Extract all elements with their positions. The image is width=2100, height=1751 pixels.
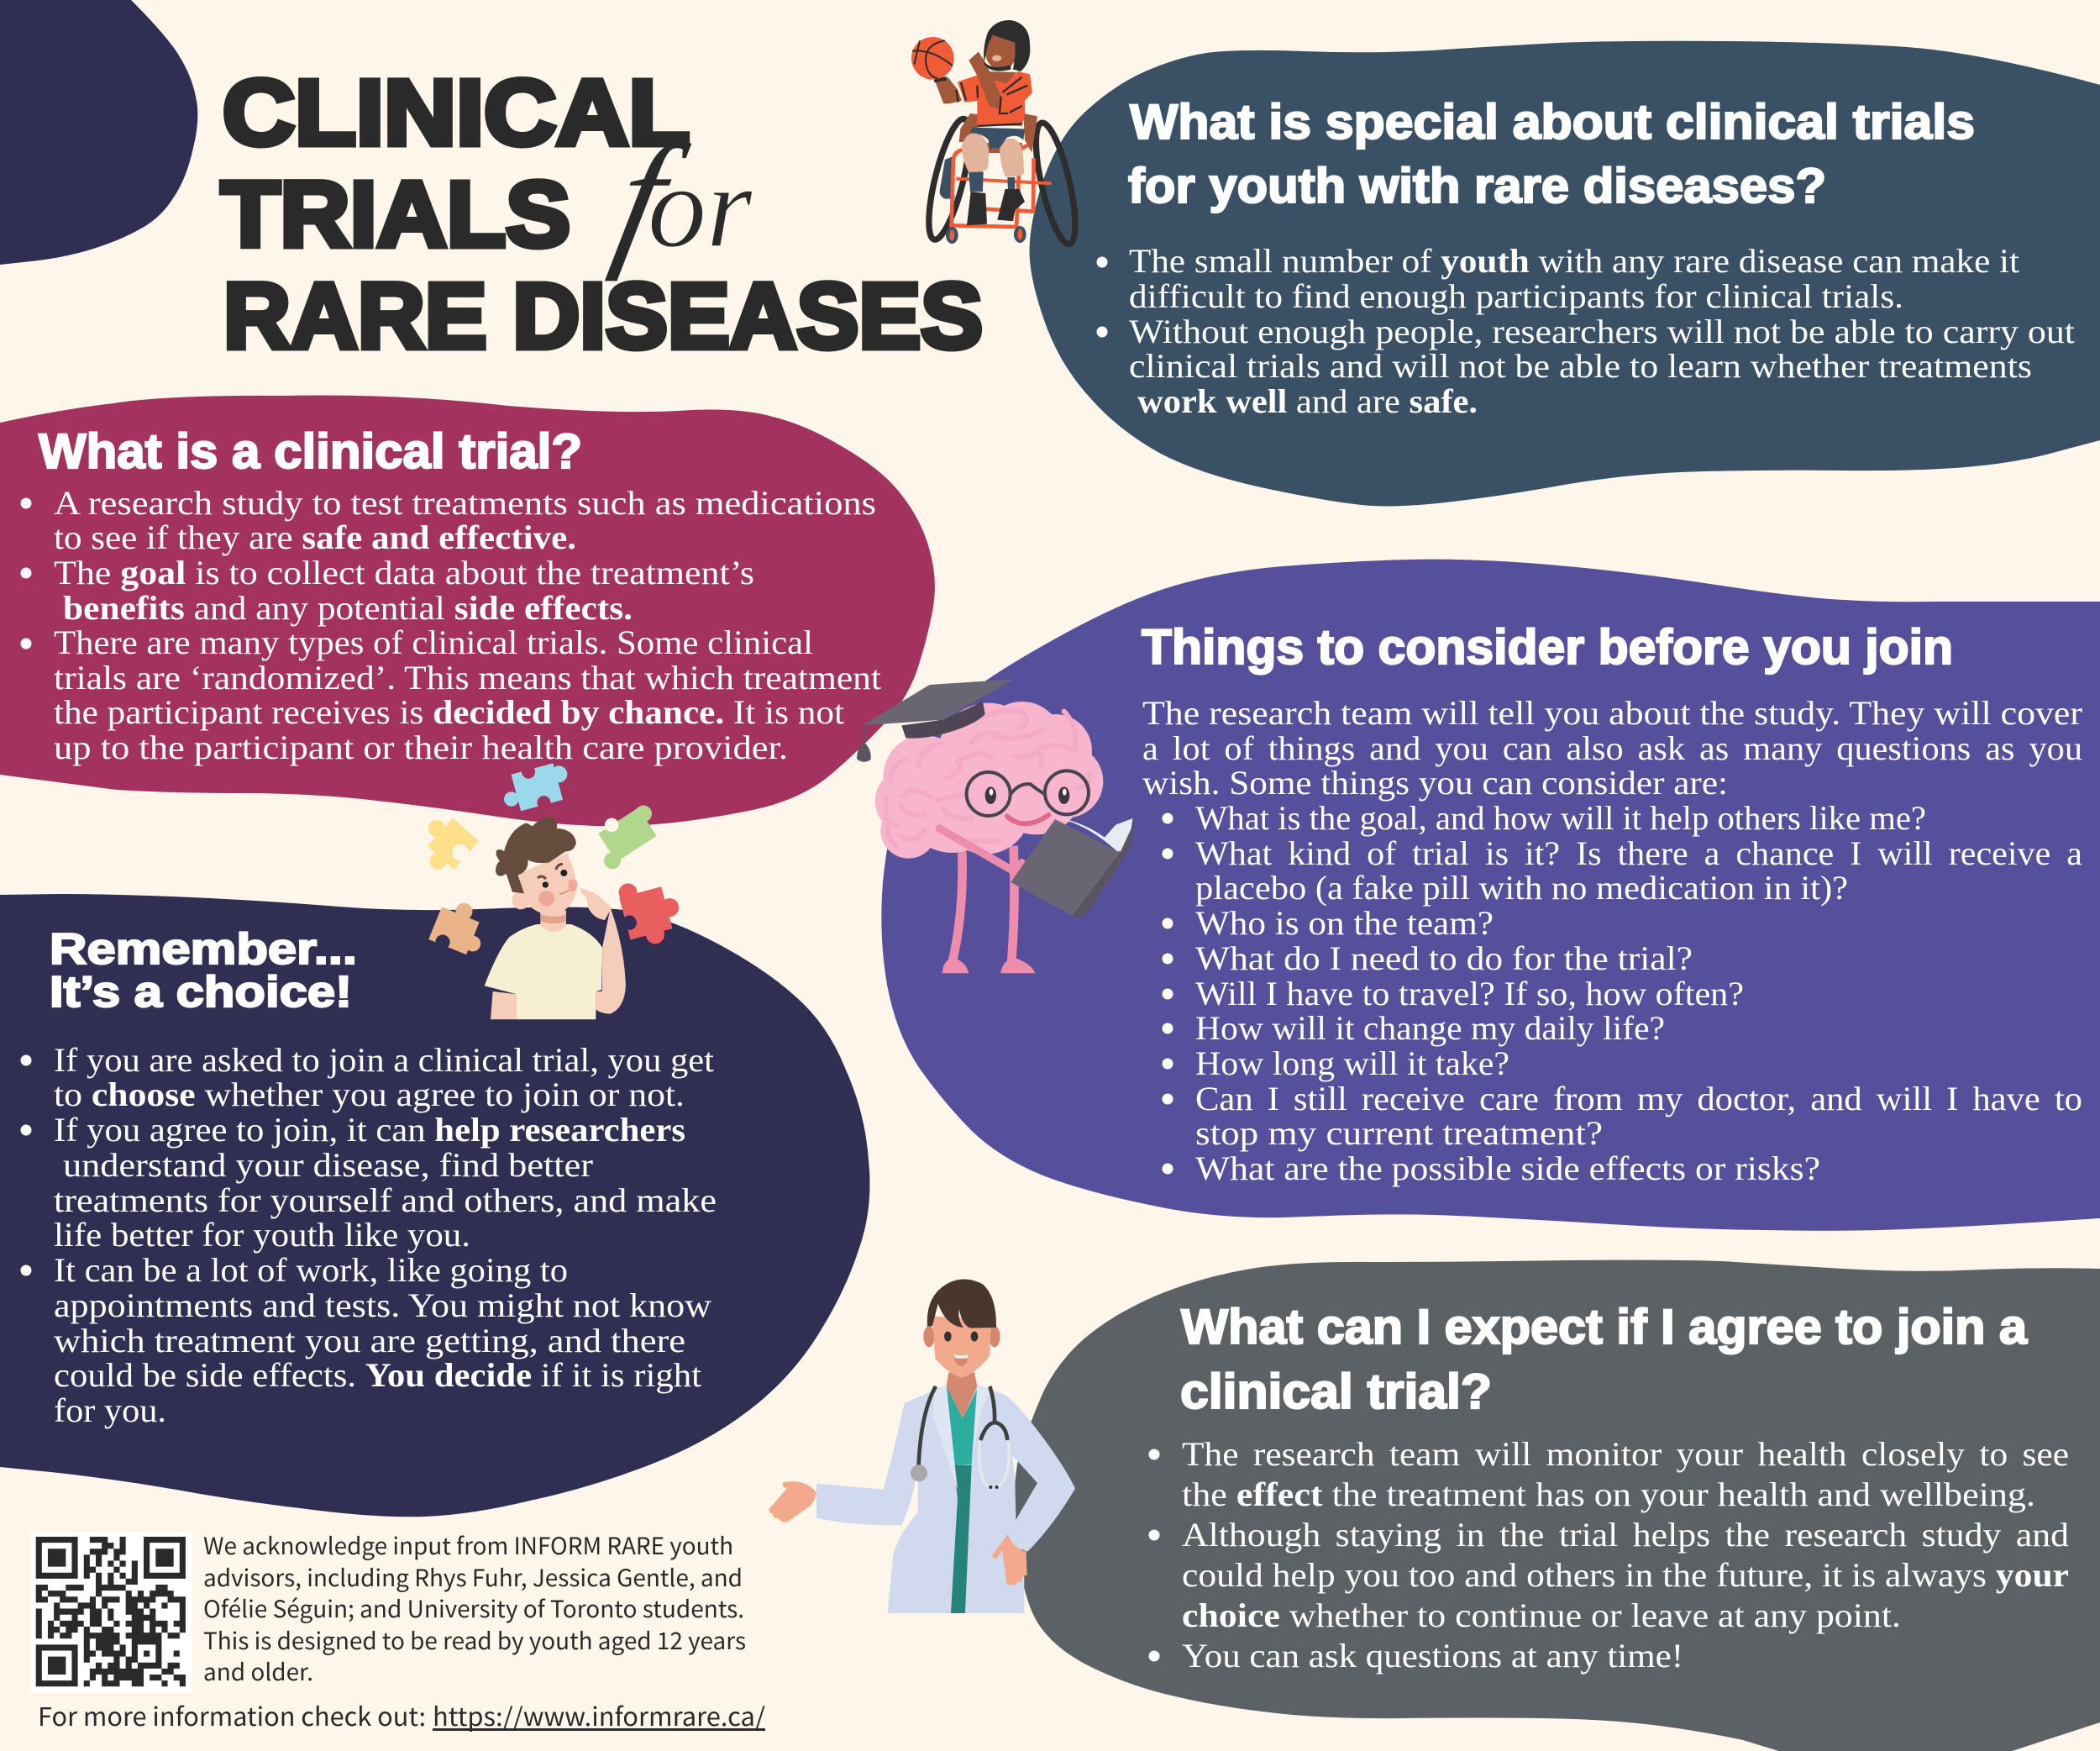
bullet list: There are many types of clinical trials. Some clinical <box>54 623 813 661</box>
bullet list <box>20 1041 717 1429</box>
icon: blue puzzle piece <box>497 755 575 819</box>
boy figure <box>485 817 626 1019</box>
bullet list: How long will it take? <box>1195 1044 1509 1082</box>
more information link line: For more information check out: <box>38 1696 426 1733</box>
bullet list: The goal is to collect data about the treatment’s <box>54 554 754 592</box>
bullet list: life better for youth like you. <box>54 1216 470 1254</box>
illustration: boy thinking with puzzle pieces <box>427 755 687 1019</box>
heading <box>50 925 357 1017</box>
acknowledgement text: This is designed to be read by youth aged 12 years <box>203 1623 746 1657</box>
bullet list <box>1097 242 2075 420</box>
bullet list: What do I need to do for the trial? <box>1195 939 1693 977</box>
panel background <box>0 395 935 826</box>
bullet list: placebo (a fake pill with no medication in it)? <box>1195 869 1848 907</box>
panel background <box>0 894 870 1517</box>
bullet list: You can ask questions at any time! <box>1182 1637 1683 1675</box>
bullet list: Can I still receive care from my doctor, and will I have to <box>1195 1080 2082 1117</box>
bullet list: What are the possible side effects or risks? <box>1195 1149 1820 1187</box>
bullet list: for you. <box>54 1391 166 1429</box>
bullet list: difficult to find enough participants for clinical trials. <box>1129 277 1903 315</box>
title: TRIALS <box>221 163 570 266</box>
bullet list: trials are ‘randomized’. This means that which treatment <box>54 659 881 697</box>
acknowledgement text: Ofélie Séguin; and University of Toronto students. <box>203 1591 744 1625</box>
heading: clinical trial? <box>1180 1365 1492 1419</box>
illustration: doctor with stethoscope <box>769 1279 1075 1613</box>
bullet list: appointments and tests. You might not know <box>54 1286 711 1324</box>
heading <box>1180 1300 2028 1419</box>
bullet list: What kind of trial is it? Is there a chance I will receive a <box>1195 834 2082 872</box>
icon: red puzzle piece <box>612 872 687 951</box>
bullet list: which treatment you are getting, and there <box>54 1322 685 1359</box>
intro paragraph: The research team will tell you about the study. They will cover <box>1142 694 2082 732</box>
heading <box>1128 95 1975 213</box>
heading: What can I expect if I agree to join a <box>1181 1300 2028 1354</box>
bullet list: Will I have to travel? If so, how often? <box>1195 975 1744 1012</box>
title <box>221 61 983 368</box>
bullet list: could be side effects. You decide if it is right <box>54 1356 701 1394</box>
icon: green puzzle piece <box>585 797 667 872</box>
title: RARE DISEASES <box>223 265 983 368</box>
bullet list: to choose whether you agree to join or not. <box>54 1075 685 1113</box>
heading: What is special about clinical trials <box>1130 95 1975 150</box>
acknowledgement text: advisors, including Rhys Fuhr, Jessica Gentle, and <box>203 1560 743 1594</box>
bullet list: A research study to test treatments such as medications <box>54 484 876 522</box>
bullet list: The research team will monitor your health closely to see <box>1182 1435 2069 1473</box>
title: CLINICAL <box>223 61 690 165</box>
bullet list: It can be a lot of work, like going to <box>54 1251 568 1289</box>
bullet list: to see if they are safe and effective. <box>54 518 576 556</box>
heading: Remember... <box>50 925 357 974</box>
heading: for youth with rare diseases? <box>1128 159 1826 213</box>
bullet list: the effect the treatment has on your health and wellbeing. <box>1182 1475 2035 1513</box>
heading: It’s a choice! <box>50 968 352 1017</box>
bullet list: Who is on the team? <box>1195 904 1494 942</box>
bullet list: up to the participant or their health care provider. <box>54 728 788 766</box>
intro paragraph: wish. Some things you can consider are: <box>1142 764 1728 802</box>
bullet list <box>20 484 881 766</box>
bullet list <box>1149 1435 2069 1675</box>
icon: yellow puzzle piece <box>428 818 479 870</box>
acknowledgement text: and older. <box>203 1654 313 1688</box>
illustration: basketball player in wheelchair <box>911 20 1084 247</box>
bullet list: understand your disease, find better <box>63 1146 593 1184</box>
title: f <box>603 115 698 282</box>
bullet list: work well and are safe. <box>1137 382 1478 420</box>
heading: What is a clinical trial? <box>39 424 582 479</box>
bullet list: What is the goal, and how will it help others like me? <box>1195 799 1926 837</box>
acknowledgement text <box>203 1528 746 1688</box>
panel: what to expect <box>1015 1260 2100 1751</box>
panel background <box>881 560 2100 1231</box>
title: or <box>648 142 753 272</box>
panel background <box>1015 1260 2100 1751</box>
more information link line: https://www.informrare.ca/ <box>433 1696 765 1733</box>
icon: orange puzzle piece <box>427 895 493 962</box>
panel: remember it's a choice <box>0 894 870 1517</box>
bullet list: treatments for yourself and others, and make <box>54 1181 717 1219</box>
bullet list: If you agree to join, it can help researchers <box>54 1111 685 1149</box>
panel: what is a clinical trial <box>0 395 935 826</box>
bullet list: How will it change my daily life? <box>1195 1009 1665 1047</box>
bullet list: choice whether to continue or leave at any point. <box>1182 1596 1901 1634</box>
acknowledgement text: We acknowledge input from INFORM RARE youth <box>203 1528 733 1562</box>
heading: Things to consider before you join <box>1142 620 1953 675</box>
bullet list: Although staying in the trial helps the research study and <box>1182 1516 2069 1554</box>
intro paragraph <box>1142 694 2082 802</box>
bullet list: clinical trials and will not be able to learn whether treatments <box>1129 347 2032 385</box>
bullet list: If you are asked to join a clinical trial, you get <box>54 1041 714 1079</box>
illustration: brain reading a book <box>857 679 1137 973</box>
bullet list: benefits and any potential side effects. <box>63 589 633 627</box>
panel background <box>1030 41 2100 506</box>
bullet list <box>1163 799 2082 1187</box>
corner blob <box>0 0 197 265</box>
bullet list: stop my current treatment? <box>1195 1114 1603 1152</box>
intro paragraph: a lot of things and you can also ask as many questions as you <box>1142 729 2082 767</box>
QR code <box>30 1532 192 1693</box>
panel: things to consider <box>881 560 2100 1231</box>
bullet list: The small number of youth with any rare disease can make it <box>1129 242 2019 280</box>
panel: special about trials for youth <box>1030 41 2100 506</box>
bullet list: Without enough people, researchers will not be able to carry out <box>1129 313 2075 350</box>
more information link line <box>38 1696 765 1733</box>
bullet list: the participant receives is decided by chance. It is not <box>54 693 844 731</box>
bullet list: could help you too and others in the future, it is always your <box>1182 1556 2069 1594</box>
